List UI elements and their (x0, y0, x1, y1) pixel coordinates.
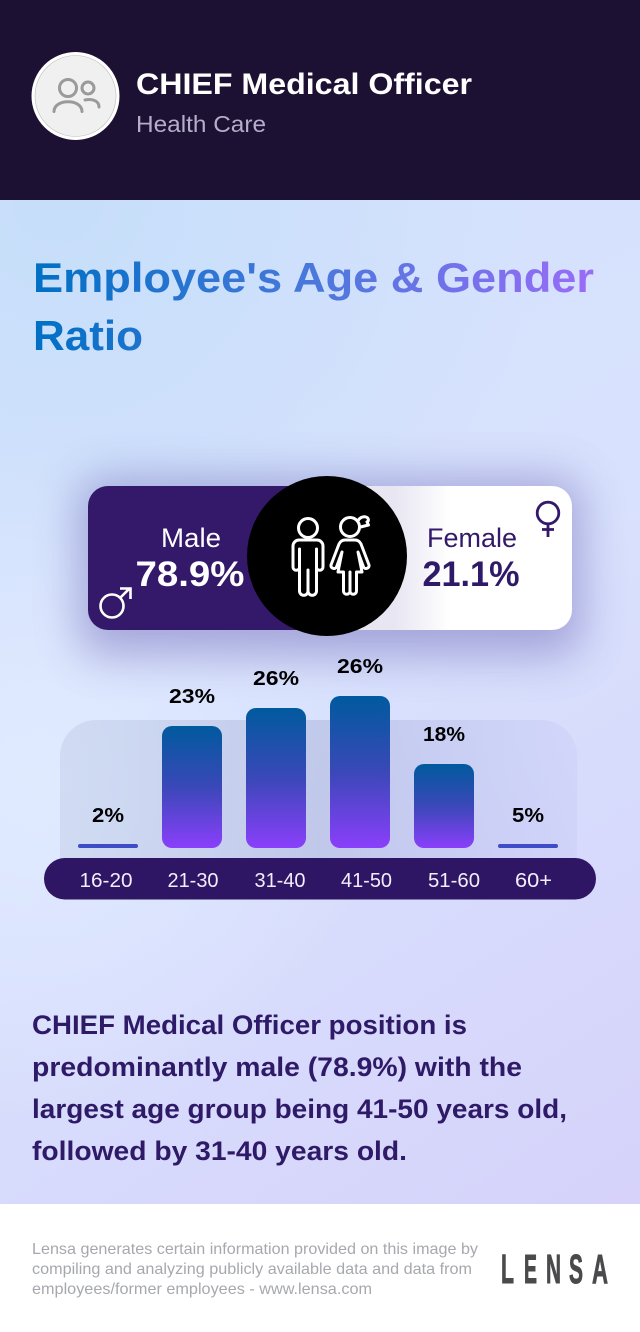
bar 60+ (498, 805, 558, 848)
disclaimer (32, 1241, 478, 1298)
gender ratio card (78, 476, 582, 656)
bar 21-30 (162, 686, 222, 848)
age axis pill: 16-20 (80, 869, 132, 892)
footer (0, 1204, 640, 1332)
heading (33, 254, 594, 359)
panel: female (330, 486, 572, 630)
male percentage: 78.9% (136, 555, 244, 594)
industry subtitle: Health Care (136, 111, 266, 137)
bar 41-50: 26% (337, 656, 383, 678)
female label: Female (427, 523, 517, 553)
age axis pill: 31-40 (254, 869, 306, 892)
age axis pill (44, 858, 596, 900)
logo: LENSA: E (524, 1246, 537, 1292)
panel: male (88, 486, 330, 630)
age axis pill: 51-60 (428, 869, 480, 892)
chart backdrop (60, 720, 577, 858)
logo: LENSA (501, 1246, 608, 1292)
icon: female symbol (537, 502, 559, 537)
icon: avatar with people (32, 52, 120, 140)
icon: girl figure (331, 517, 369, 594)
disclaimer: Lensa generates certain information provided on this image by (32, 1241, 478, 1258)
male label: Male (161, 523, 221, 553)
icon: boy figure (293, 518, 323, 595)
summary text: followed by 31-40 years old. (32, 1136, 407, 1166)
job title: CHIEF Medical Officer (136, 68, 473, 101)
age axis pill: 21-30 (168, 869, 218, 892)
disclaimer: employees/former employees - www.lensa.com (32, 1281, 372, 1298)
age axis pill: 41-50 (341, 869, 392, 892)
bar 60+: 5% (512, 805, 544, 827)
logo: LENSA: S (569, 1246, 583, 1292)
bar 16-20 (78, 805, 138, 848)
bar 51-60 (414, 724, 474, 848)
disclaimer: compiling and analyzing publicly available data and data from (32, 1261, 472, 1278)
bar 51-60: 18% (423, 724, 465, 746)
summary text: CHIEF Medical Officer position is (32, 1010, 467, 1040)
summary text (32, 1010, 567, 1166)
heading: Employee's Age & Gender (33, 254, 594, 301)
bar 41-50 (330, 656, 390, 848)
bar 21-30: 23% (169, 686, 215, 708)
icon: male symbol (100, 588, 130, 618)
header band (0, 0, 640, 200)
bar chart (44, 656, 596, 900)
female percentage: 21.1% (422, 555, 520, 594)
center circle with figures (247, 476, 407, 636)
summary text: predominantly male (78.9%) with the (32, 1052, 522, 1082)
logo: LENSA: N (546, 1246, 561, 1292)
bar 31-40: 26% (253, 668, 299, 690)
bar 31-40 (246, 668, 306, 848)
heading: Ratio (33, 312, 143, 359)
bar 16-20: 2% (92, 805, 124, 827)
summary text: largest age group being 41-50 years old, (32, 1094, 567, 1124)
age axis pill: 60+ (515, 869, 552, 892)
logo: LENSA: A (592, 1246, 608, 1292)
background panel (0, 200, 640, 1204)
logo: LENSA: L (501, 1246, 514, 1292)
